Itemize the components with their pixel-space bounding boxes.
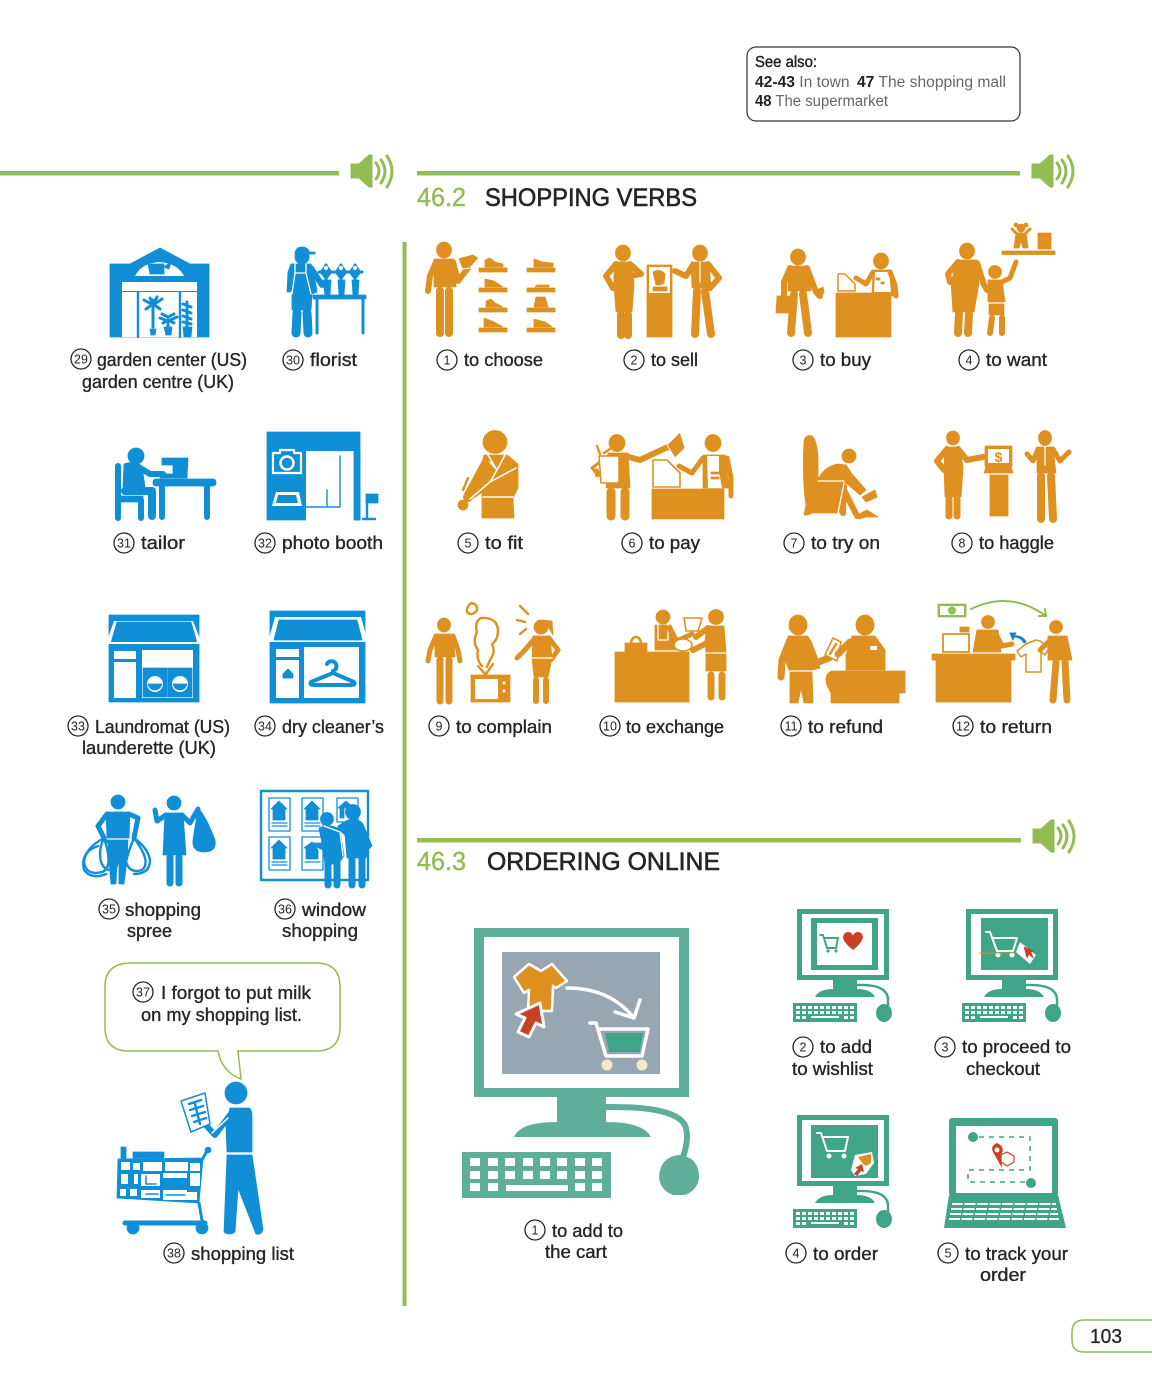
label 32: photo booth xyxy=(282,533,383,553)
icon: customer paying cashier xyxy=(592,432,731,519)
panel: to add to the cart xyxy=(462,928,699,1262)
icon: customer exchanging item xyxy=(615,610,726,702)
icon: computer with wishlist xyxy=(793,909,892,1022)
label 1 xyxy=(525,1220,623,1262)
icon: large computer xyxy=(462,928,699,1198)
label 31: 31 xyxy=(117,536,131,550)
icon: shopping spree xyxy=(83,795,215,884)
callout: speech bubble 37: on my shopping list. xyxy=(141,1005,302,1025)
label 3 xyxy=(935,1037,1071,1079)
label 33: launderette (UK) xyxy=(82,738,216,758)
icon: window shopping xyxy=(261,791,372,885)
label 3: checkout xyxy=(966,1059,1040,1079)
panel: florist xyxy=(283,247,366,370)
panel: to haggle xyxy=(937,430,1069,553)
label 36 xyxy=(275,899,367,941)
heading 46.3: ORDERING ONLINE xyxy=(487,848,720,876)
label 32: 32 xyxy=(258,536,272,550)
label 5 xyxy=(938,1243,1068,1285)
label 36: 36 xyxy=(278,902,292,916)
label 2: to sell xyxy=(651,350,698,370)
label 3: to buy xyxy=(820,350,871,370)
label 4 xyxy=(786,1243,878,1264)
label 3: 3 xyxy=(800,354,807,368)
label 4: to order xyxy=(813,1244,878,1264)
icon: computer with order xyxy=(793,1115,892,1228)
icon: dry cleaner xyxy=(268,611,368,703)
label 33 xyxy=(68,716,230,758)
panel: to return xyxy=(932,601,1072,737)
panel: to choose xyxy=(428,242,555,370)
label 6 xyxy=(622,533,700,553)
icon: customer returning a shirt xyxy=(932,601,1072,702)
section rule 46.2 with audio icon xyxy=(417,155,1073,187)
panel: shopping list xyxy=(117,1082,294,1264)
icon: shopper with trolley xyxy=(117,1082,263,1234)
panel: to pay xyxy=(592,432,731,553)
label 2: to wishlist xyxy=(792,1059,873,1079)
label 5 xyxy=(458,533,523,553)
label 5: to track your xyxy=(965,1244,1068,1264)
label 2 xyxy=(792,1037,873,1079)
label 3: to proceed to xyxy=(962,1037,1071,1057)
callout: speech bubble 37 xyxy=(105,963,340,1079)
panel: to sell xyxy=(606,245,719,370)
label 1: to choose xyxy=(464,350,543,370)
panel: to exchange xyxy=(600,610,726,737)
heading 46.2: 46.2 xyxy=(417,182,466,212)
page number xyxy=(1072,1320,1152,1352)
callout: speech bubble 37: 37 xyxy=(136,986,150,1000)
label 29: garden centre (UK) xyxy=(82,372,234,392)
label 10: 10 xyxy=(603,720,617,734)
see also box: 42-43 In town 47 The shopping mall xyxy=(755,74,1006,91)
panel: shopping spree xyxy=(83,795,215,941)
heading 46.2: SHOPPING VERBS xyxy=(485,184,697,212)
label 31 xyxy=(114,533,185,553)
label 1: 1 xyxy=(532,1224,539,1238)
icon: customer buying at till xyxy=(776,249,896,337)
see also box: See also: xyxy=(755,54,817,71)
page number: 103 xyxy=(1090,1326,1122,1348)
icon: photo booth xyxy=(267,432,378,520)
icon: clerk refunding customer xyxy=(781,615,905,703)
icon: customers complaining about smoking TV xyxy=(428,603,558,702)
icon: florist xyxy=(287,247,366,333)
label 33: 33 xyxy=(71,720,85,734)
label 1: the cart xyxy=(545,1242,607,1262)
label 6: 6 xyxy=(629,536,636,550)
panel: to add to wishlist xyxy=(792,909,892,1079)
label 12: to return xyxy=(980,717,1052,737)
panel: window shopping xyxy=(261,791,372,941)
icon: person choosing shoes xyxy=(428,242,555,333)
label 4: to want xyxy=(986,350,1047,370)
label 9: 9 xyxy=(436,720,443,734)
heading 46.2 xyxy=(417,182,697,212)
label 12 xyxy=(953,716,1052,737)
icon: laundromat xyxy=(106,615,202,702)
label 7: to try on xyxy=(811,533,880,553)
label 11: to refund xyxy=(808,717,883,737)
panel: dry cleaner xyxy=(255,611,384,737)
label 9: to complain xyxy=(456,717,552,737)
label 30: 30 xyxy=(286,354,300,368)
panel: to track your order xyxy=(938,1118,1068,1285)
label 4: 4 xyxy=(793,1246,800,1260)
label 8: 8 xyxy=(959,536,966,550)
label 11: 11 xyxy=(785,720,798,734)
see also box xyxy=(747,47,1020,121)
heading 46.3: 46.3 xyxy=(417,846,466,876)
icon: man fitting jacket xyxy=(458,430,518,518)
label 35 xyxy=(99,899,201,941)
panel: to refund xyxy=(781,615,905,737)
label 34: 34 xyxy=(258,720,272,734)
icon: shop assistant selling at kiosk xyxy=(606,245,719,337)
label 7: 7 xyxy=(791,536,798,550)
icon: person trying on shoes xyxy=(803,436,878,519)
label 10: to exchange xyxy=(626,717,724,737)
label 1: 1 xyxy=(444,354,451,368)
label 1: to add to xyxy=(552,1221,623,1241)
label 2: 2 xyxy=(800,1040,807,1054)
icon: cart xyxy=(590,1023,648,1070)
label 2: to add xyxy=(820,1037,872,1057)
label 35: 35 xyxy=(102,902,116,916)
label 5: order xyxy=(980,1265,1026,1285)
panel: to try on xyxy=(784,436,880,553)
label 4: 4 xyxy=(966,354,973,368)
see also box: 48 The supermarket xyxy=(755,93,889,110)
label 11 xyxy=(781,716,883,737)
icon: haggling over price: $ xyxy=(995,449,1003,465)
label 2: 2 xyxy=(631,354,638,368)
panel: to fit xyxy=(458,430,523,553)
panel: to complain xyxy=(428,603,558,737)
label 5: to fit xyxy=(485,533,523,553)
label 31: tailor xyxy=(141,533,185,553)
panel: tailor xyxy=(114,448,216,553)
label 36: shopping xyxy=(282,921,358,941)
label 36: window xyxy=(301,900,367,920)
panel: to order xyxy=(786,1115,892,1264)
section rule left with audio icon xyxy=(0,155,392,187)
icon: computer with checkout xyxy=(962,909,1061,1022)
label 33: Laundromat (US) xyxy=(95,717,230,737)
label 2 xyxy=(624,350,698,370)
icon: shirt and cursor xyxy=(514,964,567,1037)
label 3 xyxy=(793,350,871,370)
label 4 xyxy=(959,350,1047,370)
callout: speech bubble 37: I forgot to put milk xyxy=(161,983,312,1003)
label 3: 3 xyxy=(942,1040,949,1054)
label 35: shopping xyxy=(125,900,201,920)
label 29: 29 xyxy=(74,352,88,366)
label 5: 5 xyxy=(945,1246,952,1260)
panel: photo booth xyxy=(255,432,383,553)
label 35: spree xyxy=(127,921,172,941)
column divider xyxy=(402,242,406,1306)
label 30: florist xyxy=(310,350,357,370)
label 30 xyxy=(283,350,357,370)
label 7 xyxy=(784,533,880,553)
icon: laptop tracking parcel xyxy=(944,1118,1066,1228)
label 12: 12 xyxy=(956,720,970,734)
label 6: to pay xyxy=(649,533,700,553)
panel: laundromat xyxy=(68,615,230,758)
label 29 xyxy=(71,349,247,392)
panel: to buy xyxy=(776,249,896,370)
label 38: shopping list xyxy=(191,1244,294,1264)
label 34: dry cleaner’s xyxy=(282,717,384,737)
panel: to proceed to checkout xyxy=(935,909,1071,1079)
label 8: to haggle xyxy=(979,533,1054,553)
icon: garden center xyxy=(110,248,209,337)
label 38: 38 xyxy=(167,1246,181,1260)
label 29: garden center (US) xyxy=(97,350,247,370)
panel: to want xyxy=(948,223,1055,370)
panel: garden center xyxy=(71,248,247,392)
icon: tailor xyxy=(118,448,216,518)
label 5: 5 xyxy=(465,536,472,550)
icon: child wanting teddy on shelf xyxy=(948,223,1055,333)
section rule 46.3 with audio icon xyxy=(417,820,1074,852)
